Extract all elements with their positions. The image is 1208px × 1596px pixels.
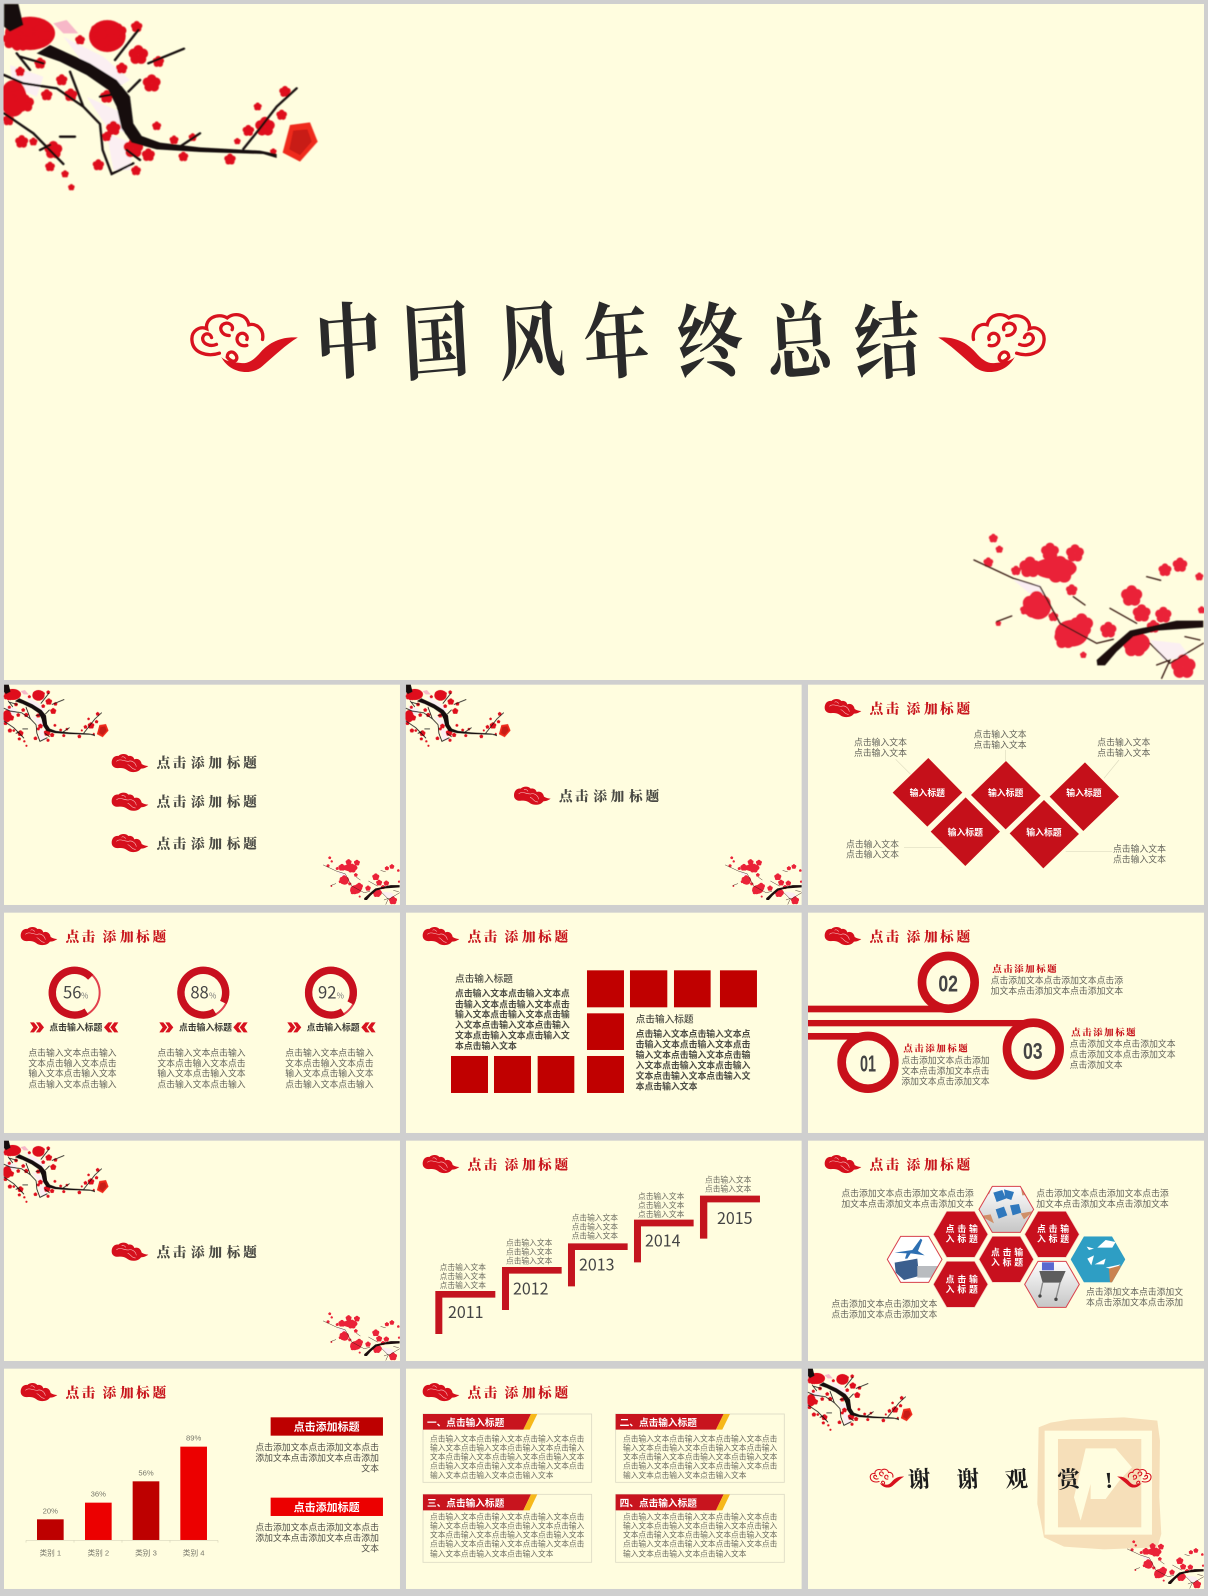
ring 03 with bar: 03 [1023,1038,1043,1064]
text block 01: 添加文本点击添加文本 [901,1075,990,1086]
step 2012 [502,1237,562,1310]
right cloud [1117,1469,1151,1488]
cloud [112,1243,148,1261]
diamond labels: 输入标题 [1026,826,1062,837]
panel: slide 9 stair timeline [406,1141,802,1361]
chevrons and captions: 点击输入标题 [307,1021,360,1032]
card 3: 点击输入文本点击输入文本点击输入文本点击 [430,1512,585,1522]
diamond labels: 输入标题 [910,787,945,798]
bar chart [26,1434,218,1558]
small lower branch [725,856,802,904]
card 1: 文本点击输入文本点击输入文本点击输入文本 [430,1451,585,1461]
panel: slide 13 thank you [807,1369,1204,1589]
text block 03: 点击添加标题 [1071,1026,1136,1038]
text labels: 点击输入文本 [1097,737,1150,748]
heading: 点击添加标题 [468,1156,569,1173]
card 4: 输入文本点击输入文本点击输入文本 [623,1548,747,1558]
ring 01 with bar: 01 [860,1050,876,1076]
heading cloud [21,1383,57,1401]
callout 2: 点击添加标题 [294,1500,360,1514]
column body text: 输入文本点击输入文本 [28,1068,117,1079]
left text block: 入文本点击输入文本点击输入 [455,1019,570,1030]
diamond labels: 输入标题 [1066,787,1102,798]
step 2015 [700,1175,760,1239]
card 3: 三、点击输入标题 [427,1498,505,1510]
step 2015: 点击输入文本 [705,1175,752,1185]
side text labels: 点击添加文本点击添加文 [1086,1286,1183,1297]
text block 02: 点击添加标题 [992,963,1057,975]
card 4: 四、点击输入标题 [620,1498,697,1510]
side text labels: 加文本点击添加文本点击添加文本 [1036,1198,1169,1209]
heading cloud [21,927,57,945]
heading: 点击添加标题 [468,928,569,945]
contents rows: 点击添加标题 [157,793,257,810]
card 3 [423,1494,592,1562]
callout 2: 添加文本点击添加文本点击添加 [255,1532,379,1543]
side text labels: 点击添加文本点击添加文本 [831,1298,937,1309]
small lower branch [323,856,400,904]
heading cloud [423,1155,459,1173]
heading cloud [423,927,459,945]
card 2: 输入文本点击输入文本点击输入文本点击输入 [623,1442,778,1452]
red squares [451,970,757,1093]
heading: 点击添加标题 [468,1384,569,1401]
text labels: 点击输入文本 [846,848,899,859]
step 2011 [435,1262,495,1334]
panel: slide 10 hexagons [808,1141,1204,1361]
small branch [405,685,511,747]
donut 88%: 88 [190,980,209,1004]
step 2012: 点击输入文本 [506,1237,553,1247]
card 1: 输入文本点击输入文本点击输入文本点击输入 [430,1442,585,1452]
right text block: 击输入文本点击输入文本点击 [636,1039,751,1050]
card 3: 文本点击输入文本点击输入文本点击输入文本 [430,1530,585,1540]
text labels: 点击输入文本 [974,739,1027,750]
right text block: 入文本点击输入文本点击输入 [636,1059,751,1070]
photo hexagon outline [1025,1261,1079,1307]
heading: 点击添加标题 [870,700,971,717]
bar chart: 类别 1 [39,1548,61,1558]
text block 02: 加文本点击添加文本点击添加文本 [991,985,1123,996]
column body text: 文本点击输入文本点击 [285,1057,374,1068]
callout 1: 文本 [361,1462,379,1473]
ring 02 with bar: 02 [938,970,958,996]
panel: slide 7 ring timeline [808,913,1204,1133]
text labels [846,729,1166,864]
side text labels: 点击添加文本点击添加文本 [831,1309,937,1320]
hexagon labels: 入标题 [1037,1233,1069,1244]
text block 02: 点击添加文本点击添加文本点击添 [991,974,1123,985]
donut 88%: % [209,991,217,1002]
panel: slide 2 table of contents [3,685,400,905]
heading cloud [825,1155,861,1173]
card 2: 文本点击输入文本点击输入文本点击输入文本 [623,1451,778,1461]
left cloud ornament [192,315,298,372]
left text block [455,973,570,1051]
leader lines [896,750,1119,852]
card 3: 输入文本点击输入文本点击输入文本点击输入 [430,1521,585,1531]
cloud [514,787,551,805]
left text block: 点击输入标题 [455,973,513,985]
photo hexagon: plane and truck [888,1237,942,1282]
left text block: 文本点击输入文本点击输入文 [455,1030,570,1041]
panel: slide 8 section title [3,1141,400,1361]
left text block: 本点击输入文本 [455,1040,517,1051]
stamp watermark [1037,1417,1161,1549]
column body text: 输入文本点击输入文本 [285,1068,374,1079]
panel: slide 3 section title [405,685,802,905]
text block 01: 文本点击添加文本点击 [901,1065,990,1076]
bar chart: 类别 3 [135,1548,157,1558]
text labels: 点击输入文本 [1113,853,1166,864]
diamonds [893,758,1119,868]
step 2012: 2012 [513,1275,549,1299]
step 2011: 2011 [448,1299,483,1323]
text block 01 [901,1042,990,1086]
left text block: 输入文本点击输入文本点击输 [455,1009,570,1020]
heading: 点击添加标题 [66,928,167,945]
step 2013 [568,1212,628,1286]
right text block: 输入文本点击输入文本点击输 [636,1049,751,1060]
card 2: 点击输入文本点击输入文本点击输入文本点击 [623,1460,778,1470]
bar chart: 56% [138,1469,154,1478]
plum branch top left [0,4,318,190]
donut 88% [173,962,234,1023]
hexagon labels: 点击输 [991,1246,1023,1257]
right text block: 点击输入文本点击输入文本点 [636,1028,751,1039]
card 2: 二、点击输入标题 [620,1417,697,1429]
text block 03 [1070,1026,1176,1070]
step 2014: 2014 [645,1228,681,1252]
column body text: 点击输入文本点击输入 [157,1078,246,1089]
callout 1: 点击添加标题 [294,1420,360,1434]
card 2 [616,1414,784,1482]
photo hexagon outline [979,1186,1034,1232]
text labels: 点击输入文本 [1113,843,1166,854]
callout 2: 文本 [361,1542,379,1553]
small branch [3,685,109,747]
column body text: 文本点击输入文本点击 [157,1057,246,1068]
small branch [3,1141,109,1203]
photo hexagon: shopping cart [1025,1262,1078,1307]
ring 02 with bar [808,956,975,1012]
card 2: 点击输入文本点击输入文本点击输入文本点击 [623,1433,778,1443]
small lower branch [323,1312,400,1360]
photo hexagon: puzzle [980,1187,1033,1232]
right text block: 本点击输入文本 [636,1080,698,1091]
step 2013: 点击输入文本 [572,1230,618,1240]
donut 92%: 92 [318,980,336,1004]
hexagon labels: 点击输 [946,1273,978,1284]
step 2013: 2013 [579,1251,614,1275]
side text labels: 点击添加文本点击添加文本点击添 [841,1188,974,1199]
card 1: 点击输入文本点击输入文本点击输入文本点击 [430,1433,585,1443]
chevrons and captions [30,1021,376,1032]
bar chart: 36% [91,1490,106,1499]
right text block [636,1013,751,1091]
column body text: 点击输入文本点击输入 [28,1047,117,1058]
step 2013: 点击输入文本 [572,1212,618,1222]
contents rows [112,754,257,852]
chevrons and captions: 点击输入标题 [49,1021,102,1032]
column body text: 点击输入文本点击输入 [28,1078,117,1089]
side text labels: 加文本点击添加文本点击添加文本 [841,1198,974,1209]
step 2013: 点击输入文本 [572,1221,618,1231]
text block 02 [991,963,1123,996]
callout 2 [255,1498,383,1553]
column body text: 输入文本点击输入文本 [157,1068,246,1079]
text labels: 点击输入文本 [854,737,907,748]
callout 1 [255,1417,383,1473]
step 2011: 点击输入文本 [440,1271,486,1281]
text labels: 点击输入文本 [854,747,907,758]
diamond labels: 输入标题 [988,787,1023,798]
title: 中国风年终总结 [313,295,923,393]
section title: 点击添加标题 [157,1244,257,1261]
ring 01 with bar [808,1033,894,1089]
heading cloud [825,699,861,717]
plum branch bottom right [974,534,1205,678]
contents rows: 点击添加标题 [157,755,257,772]
bar chart: 89% [186,1434,201,1443]
card 1 [423,1414,592,1482]
photo hexagon outline [887,1236,942,1282]
bar chart: 20% [43,1506,58,1515]
text block 01: 点击添加文本点击添加 [901,1055,990,1066]
bar chart: 类别 2 [87,1548,109,1558]
step 2014: 点击输入文本 [638,1200,685,1210]
card 4 [616,1494,784,1562]
step 2014: 点击输入文本 [638,1209,685,1219]
text labels: 点击输入文本 [974,729,1027,740]
column body text: 文本点击输入文本点击 [28,1057,117,1068]
hexagon labels: 点击输 [1037,1223,1069,1234]
left text block: 击输入文本点击输入文本点击 [455,998,570,1009]
small lower branch [1127,1540,1204,1588]
contents rows: 点击添加标题 [157,835,257,852]
step 2015: 点击输入文本 [705,1184,752,1194]
side text labels: 本点击添加文本点击添加 [1086,1296,1183,1307]
left cloud [870,1469,904,1488]
photo hexagon: paper planes [1070,1235,1127,1284]
text block 03: 点击添加文本点击添加文本 [1070,1038,1176,1049]
card 1: 一、点击输入标题 [427,1417,505,1429]
heading cloud [825,927,861,945]
panel: slide 6 red squares [406,913,802,1133]
heading: 点击添加标题 [870,928,971,945]
panel: slide 12 text cards [406,1369,802,1589]
small branch [807,1369,913,1431]
card 4: 文本点击输入文本点击输入文本点击输入文本 [623,1530,778,1540]
card 4: 点击输入文本点击输入文本点击输入文本点击 [623,1512,778,1522]
bar chart: 类别 4 [183,1548,205,1558]
left text block: 点击输入文本点击输入文本点 [455,988,570,999]
text block 03: 点击添加文本点击添加文本 [1070,1048,1176,1059]
right text block: 点击输入标题 [636,1013,694,1025]
step 2015: 2015 [717,1205,753,1229]
chevrons and captions: 点击输入标题 [179,1021,232,1032]
hexagon labels: 点击输 [946,1223,978,1234]
step 2014: 点击输入文本 [638,1191,685,1201]
column body text: 点击输入文本点击输入 [285,1047,374,1058]
donut 92%: % [337,991,345,1002]
card 1: 输入文本点击输入文本点击输入文本 [430,1470,554,1480]
donut 56%: 56 [63,980,81,1004]
card 3: 点击输入文本点击输入文本点击输入文本点击 [430,1539,585,1549]
diamond labels: 输入标题 [948,826,983,837]
callout 1: 添加文本点击添加文本点击添加 [255,1452,379,1463]
heading: 点击添加标题 [870,1156,971,1173]
text block 03: 点击添加文本 [1070,1059,1123,1070]
right text block: 文本点击输入文本点击输入文 [636,1070,751,1081]
side text labels: 点击添加文本点击添加文本点击添 [1036,1188,1169,1199]
text labels: 点击输入文本 [846,838,899,849]
panel: slide 11 bar chart [4,1369,400,1589]
red hexagons [933,1211,1079,1307]
right cloud ornament [938,315,1044,372]
column body text: 点击输入文本点击输入 [285,1078,374,1089]
hexagon labels [946,1223,1069,1295]
card 1: 点击输入文本点击输入文本点击输入文本点击 [430,1460,585,1470]
heading cloud [423,1383,459,1401]
panel: cover slide [0,4,1205,680]
card 2: 输入文本点击输入文本点击输入文本 [623,1470,747,1480]
donut 56% [44,962,105,1023]
column body text: 点击输入文本点击输入 [157,1047,246,1058]
hexagon labels: 入标题 [946,1284,978,1295]
card 4: 点击输入文本点击输入文本点击输入文本点击 [623,1539,778,1549]
text labels: 点击输入文本 [1097,747,1150,758]
step 2012: 点击输入文本 [506,1255,553,1265]
side text labels [831,1188,1183,1320]
hexagon labels: 入标题 [991,1256,1023,1267]
step 2011: 点击输入文本 [440,1280,486,1290]
step 2012: 点击输入文本 [506,1246,553,1256]
donut 92% [300,962,362,1023]
heading: 点击添加标题 [66,1384,167,1401]
section title: 点击添加标题 [559,788,660,805]
step 2014 [634,1191,694,1262]
panel: slide 4 diamonds [808,685,1204,905]
callout 1: 点击添加文本点击添加文本点击 [255,1442,379,1453]
card 4: 输入文本点击输入文本点击输入文本点击输入 [623,1521,778,1531]
ring 03 with bar [808,1020,1060,1075]
column body text [28,1047,374,1089]
thank you text: 谢谢观赏! [907,1466,1114,1493]
donut 56%: % [81,991,89,1002]
panel: slide 5 donut charts [4,913,400,1133]
card 3: 输入文本点击输入文本点击输入文本 [430,1548,554,1558]
diamond labels [910,787,1102,837]
callout 2: 点击添加文本点击添加文本点击 [255,1522,379,1533]
hexagon labels: 入标题 [946,1233,978,1244]
step 2011: 点击输入文本 [440,1262,486,1272]
text block 01: 点击添加标题 [903,1042,968,1054]
